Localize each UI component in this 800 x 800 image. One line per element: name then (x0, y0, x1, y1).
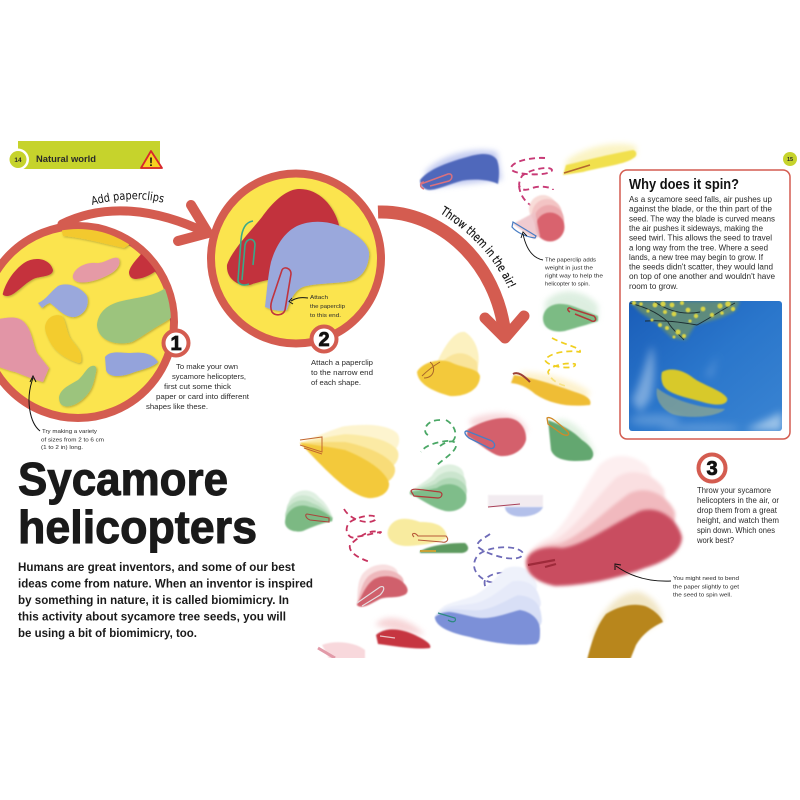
badge: step 1 (164, 330, 188, 356)
panel: step 1 circle with cut-out shapes (0, 226, 178, 418)
shape: red left (3, 259, 53, 296)
photo: seed spinning against the sky (629, 301, 782, 432)
title (18, 453, 257, 553)
arrow label: Throw them in the air: Throw them in the air! (442, 206, 516, 288)
shape: blue lower (105, 352, 158, 376)
header banner: Natural world (7, 141, 160, 170)
text: introduction: this activity about sycamore tree seeds, you will (18, 610, 286, 624)
seed: blue top (420, 150, 502, 190)
seed: red spinning (512, 195, 564, 242)
arrow: add paperclips (62, 205, 208, 241)
seed: green flat (420, 543, 468, 553)
shape: yellow top (62, 226, 130, 248)
seed: large yellow (300, 398, 405, 498)
panel: step 2 circle with paperclips (211, 174, 381, 344)
text block: explanation: the air pushes it sideways, making the (629, 224, 764, 233)
text block: explanation: As a sycamore seed falls, air pushes up (629, 195, 773, 204)
text block: explanation: seed. The way the blade is curved means (629, 214, 775, 223)
seed: red with blue clip (465, 413, 527, 456)
title: Sycamore (18, 453, 228, 505)
text: step 3 instructions: helicopters in the air, or (697, 496, 779, 505)
text: introduction: ideas come from nature. When an inventor is inspired (18, 576, 313, 590)
text: step 3 instructions (696, 486, 779, 545)
seed: pale yellow with clip (388, 519, 448, 546)
shape: blue seed (265, 222, 369, 311)
title: helicopters (18, 501, 257, 553)
callout: bend the paper: the paper slightly to get (673, 584, 739, 590)
text block: explanation: against the blade, or the thin part of the (629, 205, 773, 214)
seed: green right (543, 291, 598, 332)
page number 15 (783, 152, 797, 166)
text block: explanation: lands, a new tree may begin to grow. If (629, 253, 764, 262)
text: step 1 instructions: first cut some thick (164, 382, 231, 391)
text: step 3 instructions: spin down. Which ones (697, 526, 775, 535)
shape: small green (59, 366, 96, 406)
text: step 2 instructions: of each shape. (311, 378, 361, 387)
page number 15: 15 (787, 157, 793, 163)
text: step 1 instructions (146, 362, 250, 411)
icon: warning triangle (141, 151, 162, 169)
text: step 3 instructions: drop them from a great (697, 506, 778, 515)
callout: attach the paperclip: to this end. (310, 313, 341, 319)
text: step 1 instructions: shapes like these. (146, 402, 208, 411)
text block: explanation: a long way from the tree. Where a seed (629, 243, 768, 252)
text: introduction: be using a bit of biomimicry, too. (18, 626, 197, 640)
seed: green with orange clip (547, 418, 595, 461)
text: introduction: by something in nature, it is called biomimicry. In (18, 593, 289, 607)
paperclip: green (238, 221, 255, 285)
seed: red ghost (345, 558, 408, 607)
text block: explanation (629, 195, 776, 291)
badge: step 3: 3 (706, 458, 718, 480)
callout: sizes note with arrow (29, 376, 104, 451)
text: step 2 instructions: Attach a paperclip (311, 358, 373, 367)
badge: step 1: 1 (170, 333, 182, 355)
text: step 3 instructions: Throw your sycamore (697, 486, 772, 495)
text: step 2 instructions (311, 358, 373, 387)
callout: paperclip adds weight: weight in just the (544, 266, 593, 272)
callout: paperclip adds weight: The paperclip adds (545, 258, 596, 264)
callout: bend the paper (615, 564, 739, 598)
shape: blue (38, 284, 88, 317)
seed: green left (284, 484, 339, 532)
text block: explanation: seed twirl. This allows the seed to travel (629, 234, 772, 243)
callout: paperclip adds weight: helicopter to spin. (545, 282, 590, 288)
shape: large pink (0, 318, 49, 382)
icon: warning triangle: ! (149, 155, 153, 169)
seed: small dark red (375, 618, 430, 649)
badge: step 3 (698, 454, 726, 482)
seed: yellow ghost (417, 332, 480, 396)
header banner: Natural world: 14 (14, 157, 22, 164)
seed: yellow top (563, 144, 636, 175)
paperclip: red (271, 268, 291, 315)
seed: small pink (318, 642, 365, 660)
seed: orange yellow (511, 372, 590, 406)
callout: attach the paperclip: the paperclip (310, 304, 345, 310)
callout: paperclip adds weight (521, 232, 603, 288)
text block: explanation: room to grow. (629, 282, 678, 291)
callout: bend the paper: You might need to bend (673, 576, 739, 582)
shape: large green (97, 288, 171, 346)
callout: sizes note with arrow: Try making a variety (42, 429, 97, 435)
badge: step 2: 2 (318, 329, 330, 351)
spiral: yellow dashes (545, 338, 580, 386)
seed: green middle (406, 459, 470, 511)
seed: blue flat (488, 495, 543, 517)
text: introduction: Humans are great inventors, and some of our best (18, 560, 295, 574)
callout: sizes note with arrow: of sizes from 2 to 6 cm (41, 438, 104, 444)
spiral: magenta dashes (511, 158, 553, 206)
text: step 2 instructions: to the narrow end (311, 368, 373, 377)
heading: Why does it spin? (629, 177, 739, 193)
seed: large blue (432, 558, 543, 645)
text: step 1 instructions: paper or card into different (156, 392, 250, 401)
arrow label: Add paperclips: Add paperclips (92, 191, 164, 205)
badge: step 2 (312, 326, 336, 352)
arrow: throw them (378, 212, 524, 338)
seed: golden cropped (587, 592, 663, 660)
shape: red seed (227, 189, 339, 285)
text: step 3 instructions: work best? (696, 536, 735, 545)
shape: small pink (73, 258, 120, 283)
spiral: purple (474, 534, 523, 602)
text: step 1 instructions: sycamore helicopters, (172, 372, 246, 381)
callout: sizes note with arrow: (1 to 2 in) long. (41, 445, 83, 451)
spiral: crimson (344, 509, 381, 562)
header banner: Natural world: Natural world (36, 154, 96, 164)
text: introduction (18, 560, 313, 640)
spiral: green top (421, 420, 456, 465)
shape: yellow (45, 315, 81, 363)
callout: attach the paperclip (289, 295, 345, 319)
panel: why does it spin (620, 170, 790, 439)
seed: large red (500, 444, 683, 588)
text block: explanation: on top of one another and wouldn't have (629, 272, 776, 281)
text: step 1 instructions: To make your own (176, 362, 238, 371)
text block: explanation: the seeds didn't scatter, they would land (629, 263, 773, 272)
shape: red right (129, 253, 160, 279)
callout: bend the paper: the seed to spin well. (673, 592, 732, 598)
text: step 3 instructions: height, and watch them (697, 516, 779, 525)
callout: paperclip adds weight: right way to help the (545, 274, 603, 280)
callout: attach the paperclip: Attach (310, 295, 328, 301)
